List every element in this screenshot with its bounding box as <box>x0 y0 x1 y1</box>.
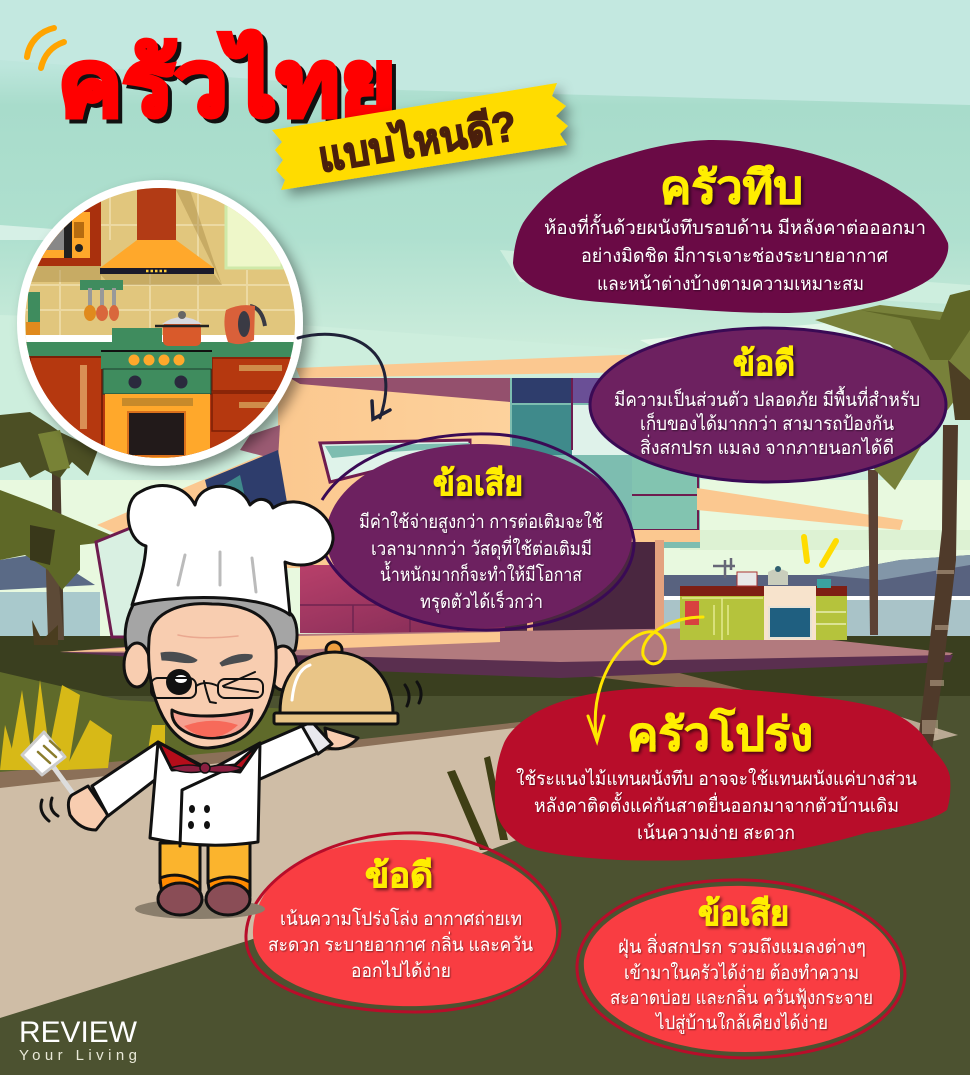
hat <box>128 486 333 615</box>
subtitle ribbon <box>272 83 568 190</box>
panel: open kitchen cons <box>577 880 905 1058</box>
logo <box>19 1016 138 1064</box>
panel: open kitchen: หลังคาติดตั้งแค่กันสาดยื่นออกมาจากตัวบ้านเดิม <box>534 792 899 817</box>
small open kitchen <box>680 558 847 640</box>
panel: open kitchen: เน้นความง่าย สะดวก <box>637 823 795 844</box>
hair <box>125 595 297 665</box>
arm right with hand <box>258 722 358 780</box>
panel: closed kitchen cons: น้ำหนักมากก็จะทำให้มีโอกาส <box>380 561 582 586</box>
panel: open kitchen cons: สะอาดบ่อย และกลิ่น ควันฟุ้งกระจาย <box>610 984 873 1010</box>
panel: closed kitchen cons: มีค่าใช้จ่ายสูงกว่า การต่อเติมจะใช้ <box>359 511 603 533</box>
panel: closed kitchen cons <box>322 434 634 630</box>
serving cloche <box>274 642 398 724</box>
chef character <box>22 486 421 919</box>
legs <box>158 843 250 915</box>
house <box>60 354 953 678</box>
panel: open kitchen: ใช้ระแนงไม้แทนผนังทึบ อาจจะใช้แทนผนังแค่บางส่วน <box>516 768 917 790</box>
arm left with spatula <box>22 732 160 830</box>
panel: open kitchen cons: เข้ามาในครัวได้ง่าย ต้องทำความ <box>624 962 859 984</box>
ground <box>0 636 970 1075</box>
kitchen photo circle <box>17 180 303 467</box>
panel: closed kitchen pros: สิ่งสกปรก แมลง จากภายนอกได้ดี <box>640 434 894 459</box>
panel: open kitchen pros <box>246 833 560 1012</box>
panel: open kitchen pros: ออกไปได้ง่าย <box>351 960 451 982</box>
shadow <box>135 899 265 919</box>
panel: open kitchen pros: ข้อดี <box>365 857 433 895</box>
arrow: from photo to closed kitchen <box>298 334 390 419</box>
panel: closed kitchen pros: ข้อดี <box>733 345 795 383</box>
panel: closed kitchen pros: เก็บของได้มากกว่า สามารถป้องกัน <box>640 411 894 435</box>
panel: closed kitchen: และหน้าต่างบ้างตามความเหมาะสม <box>597 274 864 295</box>
subtitle ribbon: แบบไหนดี? <box>315 101 520 181</box>
motion marks <box>41 682 421 821</box>
panel: closed kitchen <box>513 140 948 313</box>
ears <box>124 643 297 690</box>
logo: Your Living <box>19 1047 137 1064</box>
panel: closed kitchen cons: เวลามากกว่า วัสดุที่ใช้ต่อเติมมี <box>371 535 592 561</box>
panel: closed kitchen: ห้องที่กั้นด้วยผนังทึบรอบด้าน มีหลังคาต่อออกมา <box>544 214 926 239</box>
panel: closed kitchen: อย่างมิดชิด มีการเจาะช่องระบายอากาศ <box>581 245 888 267</box>
panel: open kitchen cons: ฝุ่น สิ่งสกปรก รวมถึงแมลงต่างๆ <box>618 933 866 959</box>
head <box>149 604 276 748</box>
palm trees right <box>815 290 970 750</box>
title: ครัวไทย <box>58 31 396 135</box>
jacket <box>150 742 260 846</box>
yellow fan plants <box>0 680 165 770</box>
panel: open kitchen pros: เน้นความโปร่งโล่ง อากาศถ่ายเท <box>280 907 522 930</box>
panel: open kitchen pros: สะดวก ระบายอากาศ กลิ่น และควัน <box>268 931 533 956</box>
panel: closed kitchen: ครัวทึบ <box>660 161 803 213</box>
logo: REVIEW <box>19 1016 138 1049</box>
title: ครัวไทย <box>62 35 400 139</box>
background sky <box>0 0 970 660</box>
panel: closed kitchen pros <box>590 328 946 482</box>
yellow attention marks <box>804 537 836 565</box>
collar <box>158 742 260 773</box>
icon: orange sound arcs <box>27 28 64 68</box>
panel: closed kitchen pros: มีความเป็นส่วนตัว ปลอดภัย มีพื้นที่สำหรับ <box>614 386 920 411</box>
sea and mountains <box>0 553 970 640</box>
panel: open kitchen <box>495 687 950 861</box>
face <box>151 635 263 738</box>
panel: open kitchen cons: ไปสู่บ้านใกล้เคียงได้ง่าย <box>654 1012 828 1034</box>
grass blades <box>447 756 508 850</box>
arrow: from open kitchen to panel <box>588 617 703 741</box>
panel: open kitchen: ครัวโปร่ง <box>627 707 813 760</box>
panel: closed kitchen cons: ข้อเสีย <box>433 465 523 503</box>
palm trees left <box>0 412 123 645</box>
kitchen illustration <box>25 188 295 458</box>
panel: closed kitchen cons: ทรุดตัวได้เร็วกว่า <box>420 589 543 614</box>
panel: open kitchen cons: ข้อเสีย <box>698 895 789 933</box>
